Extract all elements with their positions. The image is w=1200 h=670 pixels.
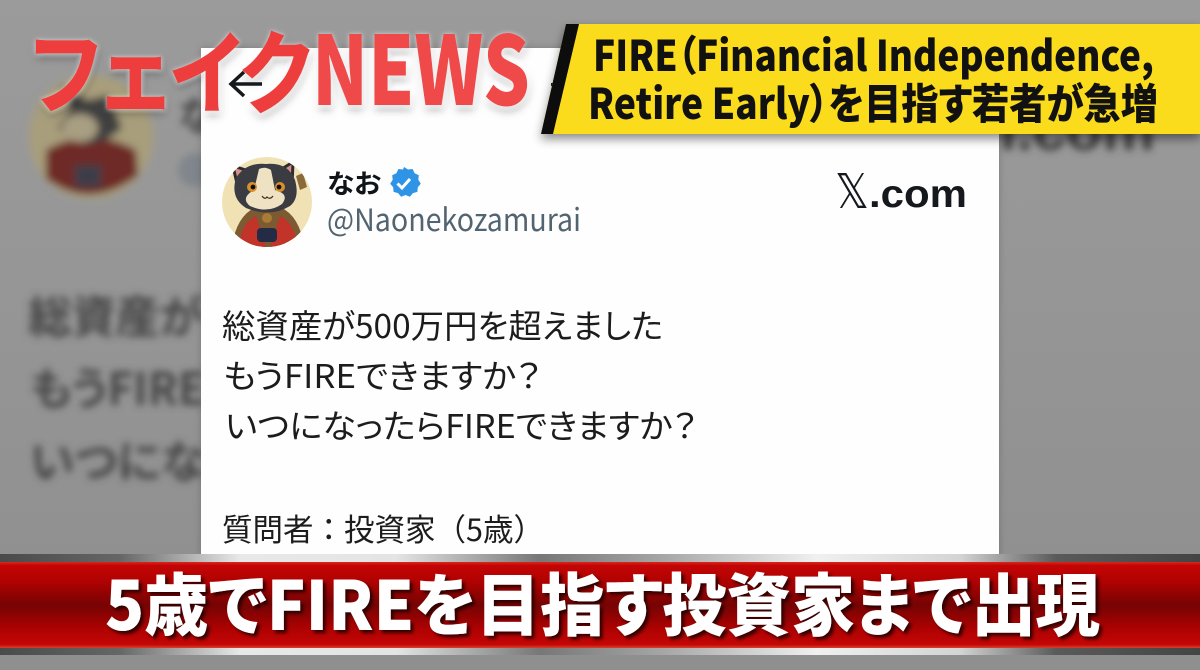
tweet body text: 質問者：投資家（5歳） xyxy=(222,505,544,550)
banner yellow band xyxy=(541,24,1200,134)
headline banner xyxy=(541,23,1200,134)
bottom caption bar xyxy=(0,551,1200,670)
icon: cat samurai avatar xyxy=(222,157,312,247)
tweet body text: もうFIREできますか？ xyxy=(223,350,541,398)
X.com logo: 𝕏 xyxy=(835,164,869,220)
title: フェイクNEWS: フェイク xyxy=(31,2,311,132)
icon: back arrow xyxy=(231,72,262,96)
title: フェイクNEWS: NEWS xyxy=(312,0,530,133)
blurred background tweet text: いつにな xyxy=(30,426,205,491)
blurred background name xyxy=(178,84,217,187)
tweet body text: 総資産が500万円を超えました xyxy=(222,300,663,348)
silver strip bottom xyxy=(0,648,1200,655)
author name: なお xyxy=(327,164,382,201)
tweet body text: いつになったらFIREできますか？ xyxy=(225,400,697,448)
blurred background tweet text: もうFIRE xyxy=(30,353,205,418)
silver strip top xyxy=(0,554,1200,562)
blurred background tweet text: 総資産が xyxy=(28,281,203,346)
banner text xyxy=(588,23,1158,132)
red band xyxy=(0,562,1200,648)
back arrow fragment xyxy=(551,83,559,86)
X.com logo: .com xyxy=(869,173,967,216)
blurred background avatar xyxy=(29,75,153,199)
blurred background domain: l.com xyxy=(1000,98,1155,163)
title: フェイクNEWS xyxy=(31,0,530,133)
icon: verified badge xyxy=(390,167,421,197)
author handle: @Naonekozamurai xyxy=(327,195,581,240)
tweet body text xyxy=(222,300,697,550)
X.com logo xyxy=(835,164,967,220)
caption text: 5歳でFIREを目指す投資家まで出現 xyxy=(105,551,1100,650)
panel: tweet card xyxy=(201,48,999,558)
blurred background tweet text xyxy=(28,281,205,491)
blurred background name: な xyxy=(178,84,217,142)
